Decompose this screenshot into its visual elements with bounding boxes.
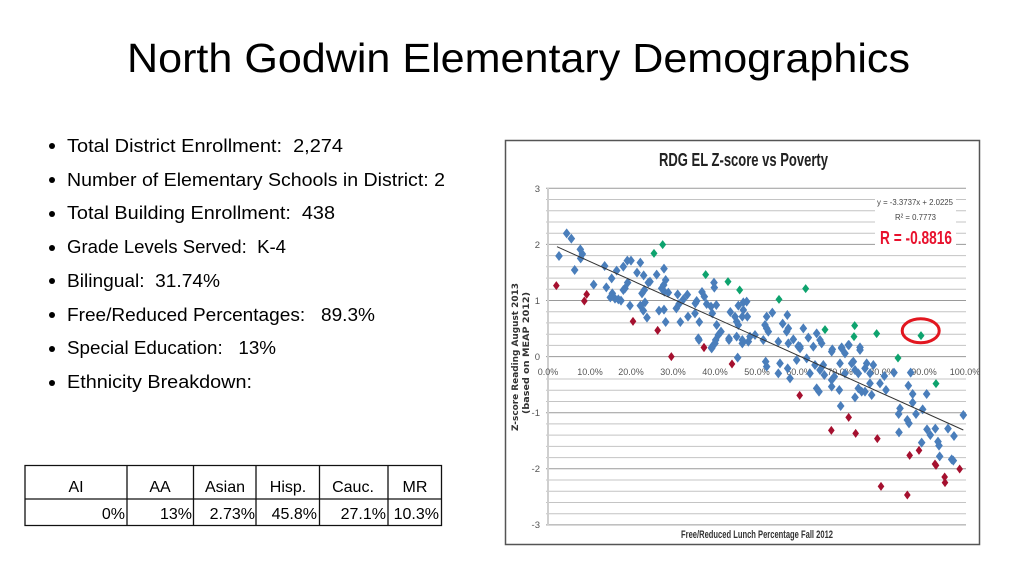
table data row: 0% xyxy=(102,506,125,523)
y axis title: (based on MEAP 2012) xyxy=(522,292,532,414)
x axis tick labels: 100.0% xyxy=(950,367,980,377)
table header row: AI xyxy=(68,479,84,496)
table: ethnicity breakdown xyxy=(25,465,442,526)
y axis tick labels: -2 xyxy=(532,464,540,475)
x axis tick labels: 10.0% xyxy=(577,367,603,377)
equation box xyxy=(875,195,956,248)
blue data points xyxy=(555,228,967,466)
bullet: special education: Special Education: 13% xyxy=(67,338,276,358)
x axis tick labels: 20.0% xyxy=(618,367,644,377)
x axis title: Free/Reduced Lunch Percentage Fall 2012 xyxy=(681,529,833,541)
x axis tick labels: 70.0% xyxy=(827,367,853,377)
y axis tick labels: 1 xyxy=(535,296,540,307)
x axis tick labels: 40.0% xyxy=(702,367,728,377)
y axis tick labels: 2 xyxy=(535,240,540,251)
x axis tick labels xyxy=(538,367,980,377)
title: North Godwin Elementary Demographics xyxy=(127,35,910,81)
x axis tick labels: 30.0% xyxy=(660,367,686,377)
regression equation: y = -3.3737x + 2.0225 xyxy=(877,197,953,207)
table data row xyxy=(102,506,439,523)
y axis title xyxy=(511,283,532,431)
table header row: Cauc. xyxy=(332,479,374,496)
green data points xyxy=(650,240,939,388)
x axis tick labels: 60.0% xyxy=(786,367,812,377)
bullet: grade levels: Grade Levels Served: K-4 xyxy=(67,237,286,257)
table header row: Asian xyxy=(205,479,245,496)
red ellipse highlighting school xyxy=(902,319,939,343)
table data row: 45.8% xyxy=(272,506,317,523)
table data row: 27.1% xyxy=(341,506,386,523)
x axis tick labels: 50.0% xyxy=(744,367,770,377)
correlation value: R = -0.8816 xyxy=(880,228,952,248)
y axis tick labels: -3 xyxy=(532,520,540,531)
table header row: Hisp. xyxy=(270,479,306,496)
r squared value: R² = 0.7773 xyxy=(895,212,936,222)
y axis tick labels xyxy=(532,184,540,531)
bullet: free/reduced percentages: Free/Reduced Percentages: 89.3% xyxy=(67,305,375,325)
panel: scatter chart xyxy=(506,140,980,544)
bullet: total building enrollment: Total Building Enrollment: 438 xyxy=(67,203,335,223)
red data points xyxy=(553,281,963,499)
x axis tick labels: 90.0% xyxy=(911,367,937,377)
table data row: 13% xyxy=(160,506,192,523)
y axis title: Z-score Reading August 2013 xyxy=(511,283,521,431)
table data row: 10.3% xyxy=(394,506,439,523)
bullet: ethnicity breakdown: Ethnicity Breakdown: xyxy=(67,372,252,392)
y axis tick labels: 0 xyxy=(535,352,540,363)
table header row: AA xyxy=(149,479,171,496)
bullet: total district enrollment: Total District Enrollment: 2,274 xyxy=(67,136,343,156)
y axis tick labels: -1 xyxy=(532,408,540,419)
x axis tick labels: 80.0% xyxy=(869,367,895,377)
bullet list: school facts xyxy=(49,136,445,392)
chart title: RDG EL Z-score vs Poverty xyxy=(659,150,828,170)
x axis tick labels: 0.0% xyxy=(538,367,558,377)
bullet: number of elementary schools: Number of Elementary Schools in District: 2 xyxy=(67,170,445,190)
bullet: bilingual: Bilingual: 31.74% xyxy=(67,271,220,291)
table header row xyxy=(68,479,427,496)
y axis tick labels: 3 xyxy=(535,184,540,195)
table data row: 2.73% xyxy=(210,506,255,523)
table header row: MR xyxy=(403,479,427,496)
trend line xyxy=(557,247,963,430)
